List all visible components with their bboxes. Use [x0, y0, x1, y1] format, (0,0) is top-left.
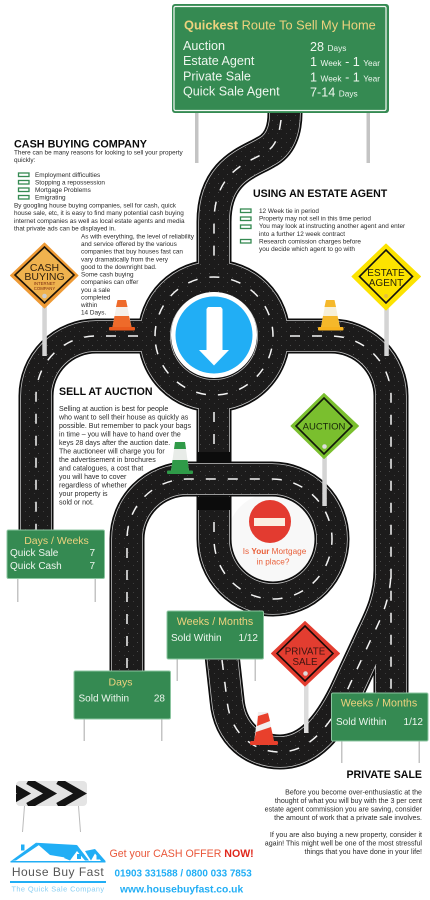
sign: days weeks: Days / Weeks [24, 535, 89, 547]
panel: sell at auction: keys 28 days after the auction date. [59, 440, 170, 447]
call to action: Get your CASH OFFER NOW! [110, 848, 254, 860]
sign: weeks months upper: 1/12 [239, 633, 258, 644]
panel: sell at auction: The auctioneer will charge you for [59, 448, 165, 455]
panel: cash buying company: that private ads can be displayed in. [14, 225, 116, 232]
panel: cash buying company: within [80, 302, 98, 309]
panel: using an estate agent: Research comission charges before [259, 238, 361, 245]
sign: weeks months upper: Weeks / Months [177, 616, 253, 628]
panel: using an estate agent: USING AN ESTATE AGENT [253, 188, 388, 200]
main route sign [172, 4, 389, 163]
sign: cash buying: BUYING [24, 271, 65, 283]
sign: days sold within: 28 [154, 694, 165, 704]
road network [36, 113, 391, 752]
panel: private sale: Before you become over-enthusiastic at the [285, 788, 422, 796]
panel: cash buying company: Some cash buying [81, 272, 134, 279]
panel: sell at auction: in time – you will have to hand over the [59, 432, 181, 438]
main route sign: 1 Week - 1 Year [310, 55, 380, 69]
main route sign: Quickest Route To Sell My Home [184, 18, 376, 32]
icon: chevron barrier [16, 781, 87, 832]
icon: no entry mortgage warning [243, 500, 307, 566]
panel: using an estate agent: you decide which agent to go with [259, 246, 355, 253]
sign: days sold within [74, 671, 170, 741]
logo: house buy fast [10, 843, 106, 894]
panel: sell at auction: the advertisement in brochures [59, 457, 156, 464]
sign: weeks months upper: Sold Within [171, 633, 222, 644]
panel: cash buying company: companies can offer [81, 279, 139, 286]
panel: sell at auction: you will have to cover [59, 474, 127, 481]
main route sign: Quick Sale Agent [183, 84, 280, 98]
main route sign: Auction [183, 39, 225, 53]
panel: private sale: PRIVATE SALE [346, 769, 422, 781]
sign: weeks months lower: 1/12 [404, 717, 423, 728]
panel: sell at auction: sold or not. [59, 499, 94, 506]
panel: sell at auction: SELL AT AUCTION [59, 386, 153, 398]
panel: sell at auction: possible. But remember to pack your bags [59, 423, 191, 430]
panel: sell at auction: and catalogues, a cost that [59, 465, 143, 472]
sign: estate agent [352, 244, 420, 356]
sign: weeks months lower: Weeks / Months [341, 698, 417, 710]
panel: cash buying company: As with everything, the level of reliability [81, 234, 195, 240]
panel: cash buying company: completed [81, 294, 111, 301]
panel: sell at auction: who want to sell their house as quickly as [58, 414, 189, 422]
logo: house buy fast: House Buy Fast [12, 865, 104, 879]
icon: no entry mortgage warning: in place? [257, 558, 290, 566]
panel: using an estate agent: You may look at instructing another agent and enter [259, 223, 406, 230]
sign: cash buying: COMPANY [34, 286, 55, 291]
panel: using an estate agent: into a further 12 week contract [259, 231, 345, 238]
panel: private sale: If you are also buying a new property, consider it [270, 831, 422, 839]
call to action: www.housebuyfast.co.uk [119, 884, 243, 896]
panel: cash buying company: CASH BUYING COMPANY [14, 138, 148, 150]
panel: sell at auction [58, 386, 191, 506]
sign: days weeks: 7 [89, 561, 95, 572]
panel: cash buying company: By googling house buying companies, sell for cash, quick [14, 202, 177, 210]
sign: cash buying: CASH [30, 262, 59, 274]
panel: private sale: again! This might well be one of the most stressful [265, 840, 422, 848]
panel: cash buying company: and service offered by the various [81, 241, 177, 248]
panel: cash buying company: you a sale [81, 287, 111, 294]
sign: cash buying: INTERNET [34, 281, 56, 286]
panel: sell at auction: your property is [59, 491, 108, 498]
main route sign: Estate Agent [183, 54, 255, 68]
sign: days weeks: Quick Cash [10, 561, 62, 572]
panel: cash buying company: 14 Days. [81, 310, 106, 317]
sign: days weeks [7, 530, 104, 602]
sign: private sale: PRIVATE [285, 646, 326, 658]
panel: private sale: things that you have done in your life! [304, 848, 422, 856]
panel: using an estate agent: Property may not sell in this time period [259, 216, 371, 222]
sign: weeks months lower: Sold Within [336, 717, 387, 728]
sign: days sold within: Sold Within [78, 694, 129, 704]
sign: weeks months lower [332, 693, 428, 763]
panel: cash buying company: house sale, etc, it is easy to find many potential cash buying [14, 210, 184, 217]
panel: sell at auction: Selling at auction is best for people [59, 406, 168, 413]
call to action: 01903 331588 / 0800 033 7853 [114, 868, 252, 880]
panel: using an estate agent: 12 Week tie in period [259, 208, 319, 215]
icon: blue roundabout arrow [171, 292, 257, 378]
main route sign: 7-14 Days [310, 86, 358, 100]
sign: private sale [272, 622, 340, 733]
mortgage loop interior [227, 493, 319, 585]
icon: orange traffic cone [109, 300, 135, 330]
panel: cash buying company: Employment difficulties [35, 172, 100, 179]
panel: cash buying company: good to the downright bad. [81, 264, 157, 271]
main route sign: Private Sale [183, 70, 251, 84]
panel: cash buying company: companies that buy houses fast can [81, 249, 183, 256]
sign: weeks months upper [167, 611, 264, 681]
sign: days weeks: Quick Sale [10, 548, 59, 559]
icon: red traffic cone [250, 712, 278, 745]
panel: private sale: the amount of work that a private sale involves. [274, 814, 422, 822]
sign: days weeks: 7 [89, 548, 95, 559]
panel: cash buying company: internet companies as well as local estate agents and media [14, 218, 185, 225]
main route sign: 1 Week - 1 Year [310, 70, 380, 84]
icon: no entry mortgage warning: Is Your Mortgage [243, 547, 307, 556]
icon: green traffic cone [167, 442, 193, 474]
panel: private sale [265, 769, 423, 856]
panel: using an estate agent [240, 188, 406, 253]
sign: days sold within: Days [109, 676, 132, 688]
sign: auction: AUCTION [303, 422, 346, 432]
sign: cash buying [10, 243, 78, 356]
icon: yellow traffic cone [318, 300, 344, 330]
panel: cash buying company: Mortgage Problems [35, 187, 91, 194]
panel: cash buying company: Emigrating [35, 194, 66, 202]
panel: cash buying company: quickly: [14, 157, 36, 164]
sign: private sale: SALE [292, 657, 318, 668]
logo: house buy fast: The Quick Sale Company [11, 884, 105, 894]
sign: estate agent: AGENT [369, 278, 403, 289]
panel: private sale: estate agent commission you are saving, consider [265, 806, 423, 814]
panel: private sale: thought of what you will buy with the 3 per cent [275, 797, 422, 805]
main route sign: 28 Days [310, 40, 346, 54]
sign: auction [291, 394, 358, 506]
panel: sell at auction: regardless of whether [59, 482, 127, 489]
call to action [110, 848, 254, 896]
panel: cash buying company: Stopping a repossession [35, 180, 105, 186]
panel: cash buying company [14, 138, 195, 317]
sign: estate agent: ESTATE [367, 268, 405, 279]
panel: cash buying company: There can be many reasons for looking to sell your property [14, 150, 184, 156]
panel: cash buying company: vary dramatically from the very [81, 256, 169, 263]
